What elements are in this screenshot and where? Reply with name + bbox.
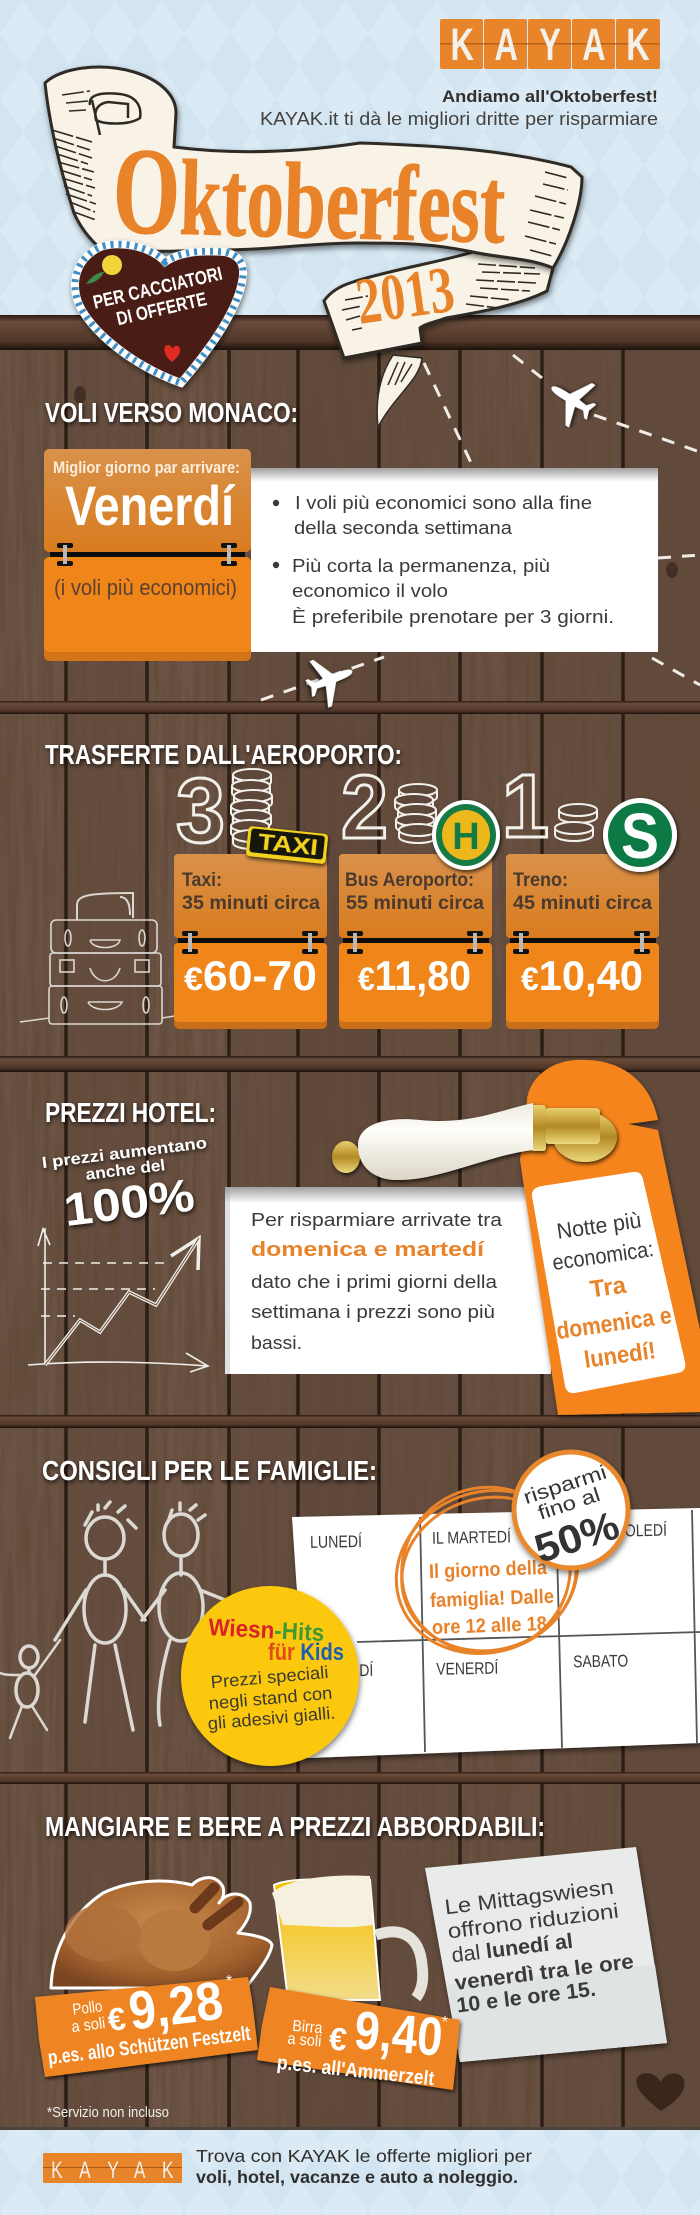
note: Mittagswiesn: offrono riduzioni — [446, 1900, 620, 1943]
intro text: KAYAK.it ti dà le migliori dritte per risparmiare — [260, 109, 658, 129]
note: Mittagswiesn: 10 e le ore 15. — [455, 1978, 597, 2017]
icon: small red heart — [164, 345, 180, 362]
panel: hotel tip: settimana i prezzi sono più — [251, 1302, 495, 1322]
panel: flight tips: della seconda settimana — [294, 518, 513, 538]
icon: plane bottom — [299, 648, 362, 712]
icon: bus stop sign: H — [452, 816, 480, 858]
callout: Wiesn-Hits for kids: gli adesivi gialli. — [207, 1702, 336, 1734]
note: Mittagswiesn: dal lunedí al — [450, 1930, 574, 1967]
ticket: chicken price: 9,28 — [126, 1971, 226, 2042]
ticket: beer price: 9,40 — [352, 2000, 445, 2068]
calendar: famiglia! Dalle — [430, 1586, 554, 1612]
callout: Wiesn-Hits for kids: Wiesn-Hits — [208, 1614, 325, 1647]
panel: flight tips: Più corta la permanenza, più — [292, 556, 550, 576]
panel: airport bus — [339, 854, 492, 1029]
ticket: chicken price: a soli — [71, 2015, 106, 2036]
KAYAK logo: KAYAK — [451, 21, 650, 70]
note: Mittagswiesn: venerdì tra le ore — [453, 1950, 635, 1995]
title: Oktoberfest: Oktoberfest — [111, 123, 507, 270]
callout: save up to 50%: risparmi — [521, 1462, 609, 1509]
callout: save up to 50%: 50% — [529, 1503, 625, 1572]
ribbon tail — [377, 355, 422, 427]
ticket: beer price: a soli — [287, 2031, 322, 2050]
banner scroll: lower fold — [324, 252, 553, 358]
heart text: PER CACCIATORI — [91, 264, 224, 314]
panel: taxi — [174, 854, 327, 1029]
icon: price rank 1 with coins — [502, 757, 597, 857]
calendar: LUNEDÍ — [310, 1532, 362, 1552]
ticket: chicken price: p.es. allo Schützen Festzelt — [47, 2023, 252, 2069]
calendar: VENERDÍ — [436, 1659, 499, 1679]
icon: dashed flight paths — [261, 355, 700, 700]
panel: hotel tip: domenica e martedí — [251, 1239, 486, 1261]
door hanger: domenica e — [555, 1302, 673, 1345]
ticket: beer price: € — [328, 2020, 349, 2058]
panel: best arrival day flip card: Miglior giorno par arrivare: — [53, 458, 240, 477]
door hanger: Notte più — [555, 1207, 643, 1244]
icon: taxi sign — [246, 826, 328, 864]
panel: train — [506, 854, 659, 1029]
footnote: *Servizio non incluso — [47, 2104, 169, 2121]
ticket: beer price: p.es. all'Ammerzelt — [276, 2052, 436, 2090]
calendar: Il giorno della — [429, 1557, 548, 1583]
panel: flight tips: I voli più economici sono alla fine — [295, 493, 592, 513]
note: Mittagswiesn: Le Mittagswiesn — [443, 1876, 615, 1919]
panel: taxi: Taxi: — [182, 870, 222, 891]
callout: save up to 50%: fino al — [535, 1484, 603, 1525]
intro text — [260, 87, 658, 129]
door hanger — [520, 1060, 700, 1415]
heading: food and drink: MANGIARE E BERE A PREZZI ABBORDABILI: — [45, 1811, 545, 1842]
intro text: Andiamo all'Oktoberfest! — [442, 87, 658, 106]
panel: flight tips — [251, 468, 658, 652]
door hanger: lunedí! — [582, 1337, 657, 1374]
panel: hotel tip — [225, 1187, 551, 1374]
panel: hotel tip: bassi. — [251, 1333, 302, 1353]
icon: beer mug — [272, 1876, 423, 2000]
calendar — [292, 1508, 700, 1758]
panel: flight tips: È preferibile prenotare per 3 giorni. — [292, 607, 614, 627]
callout: prices up to 100%: 100% — [61, 1168, 197, 1236]
ticket: beer price — [257, 1987, 460, 2090]
note: Mittagswiesn — [425, 1847, 667, 2062]
icon: price rank 1 with coins: 1 — [502, 757, 549, 857]
panel: taxi: 35 minuti circa — [182, 893, 320, 914]
icon: price rank 3 with coins — [176, 760, 272, 862]
panel: best arrival day flip card: (i voli più economici) — [54, 575, 237, 600]
panel: train: €10,40 — [521, 952, 643, 999]
heart text — [91, 264, 224, 330]
panel: train: 45 minuti circa — [513, 893, 652, 914]
panel: airport bus: 55 minuti circa — [346, 893, 484, 914]
panel: airport bus: Bus Aeroporto: — [345, 870, 474, 891]
calendar: DÍ — [359, 1661, 374, 1680]
panel: taxi: €60-70 — [184, 952, 317, 999]
footer text: Trova con KAYAK le offerte migliori per — [196, 2146, 532, 2166]
callout: Wiesn-Hits for kids: für Kids — [268, 1639, 344, 1666]
callout: save up to 50% — [514, 1452, 628, 1572]
heading: transfers: TRASFERTE DALL'AEROPORTO: — [45, 739, 402, 770]
icon: S-Bahn sign: S — [621, 800, 659, 872]
icon: bus stop sign — [432, 800, 500, 870]
callout: Wiesn-Hits for kids: negli stand con — [208, 1683, 333, 1713]
banner scroll: main band — [45, 67, 582, 268]
panel: best arrival day flip card — [44, 449, 251, 661]
icon: roast chicken — [51, 1878, 272, 1988]
icon: chalk family drawing — [0, 1502, 225, 1738]
scribbled circle — [371, 1456, 601, 1684]
callout: Wiesn-Hits for kids — [181, 1586, 359, 1766]
panel: hotel tip: dato che i primi giorni della — [251, 1272, 498, 1292]
door hanger: economica: — [551, 1236, 655, 1275]
ticket: chicken price — [35, 1971, 258, 2077]
title: year 2013: 2013 — [351, 253, 459, 339]
icon: plane top right — [538, 366, 605, 433]
KAYAK footer logo: KAYAK — [51, 2157, 174, 2184]
door hanger: Tra — [588, 1272, 628, 1303]
callout: Wiesn-Hits for kids: Prezzi speciali — [210, 1662, 329, 1692]
gingerbread heart — [75, 244, 243, 383]
ticket: chicken price: Pollo — [72, 1998, 103, 2019]
ticket: chicken price: € — [106, 2000, 128, 2038]
icon: price rank 2 with coins: 2 — [341, 758, 388, 858]
panel: train: Treno: — [513, 870, 568, 891]
icon: price rank 3 with coins: 3 — [176, 760, 225, 862]
heading: families: CONSIGLI PER LE FAMIGLIE: — [42, 1455, 377, 1486]
footer text — [196, 2146, 532, 2187]
callout: prices up to 100% — [41, 1135, 208, 1236]
callout: prices up to 100%: I prezzi aumentano — [41, 1135, 208, 1172]
panel: airport bus: €11,80 — [358, 952, 471, 999]
wooden beams — [0, 315, 700, 1784]
ticket: chicken price: * — [226, 1973, 232, 1990]
icon: sugar flower — [86, 255, 122, 284]
footer text: voli, hotel, vacanze e auto a noleggio. — [196, 2167, 518, 2187]
icon: carved heart — [636, 2073, 684, 2111]
calendar: IL MARTEDÍ — [432, 1527, 511, 1548]
icon: suitcases sketch — [20, 893, 175, 1024]
line chart sketch — [28, 1228, 208, 1372]
calendar: OLEDÍ — [625, 1521, 667, 1540]
calendar: SABATO — [573, 1651, 628, 1671]
icon: price rank 2 with coins — [341, 758, 437, 858]
heading: flights: VOLI VERSO MONACO: — [45, 397, 298, 428]
heart text: DI OFFERTE — [115, 289, 209, 330]
calendar: ore 12 alle 18 — [432, 1613, 547, 1639]
ticket: beer price: Birra — [292, 2018, 323, 2037]
panel: flight tips: economico il volo — [292, 581, 448, 601]
panel: hotel tip: Per risparmiare arrivate tra — [251, 1210, 503, 1230]
callout: prices up to 100%: anche del — [85, 1157, 166, 1184]
icon: S-Bahn sign — [603, 798, 677, 872]
icon: door handle — [332, 1103, 617, 1180]
ticket: beer price: * — [442, 2014, 448, 2031]
footer band — [0, 2127, 700, 2215]
icon: taxi sign: TAXI — [257, 829, 319, 860]
background: Bavarian diamond pattern — [0, 0, 700, 320]
heading: hotels: PREZZI HOTEL: — [45, 1097, 216, 1128]
panel: best arrival day flip card: Venerdí — [65, 474, 236, 537]
